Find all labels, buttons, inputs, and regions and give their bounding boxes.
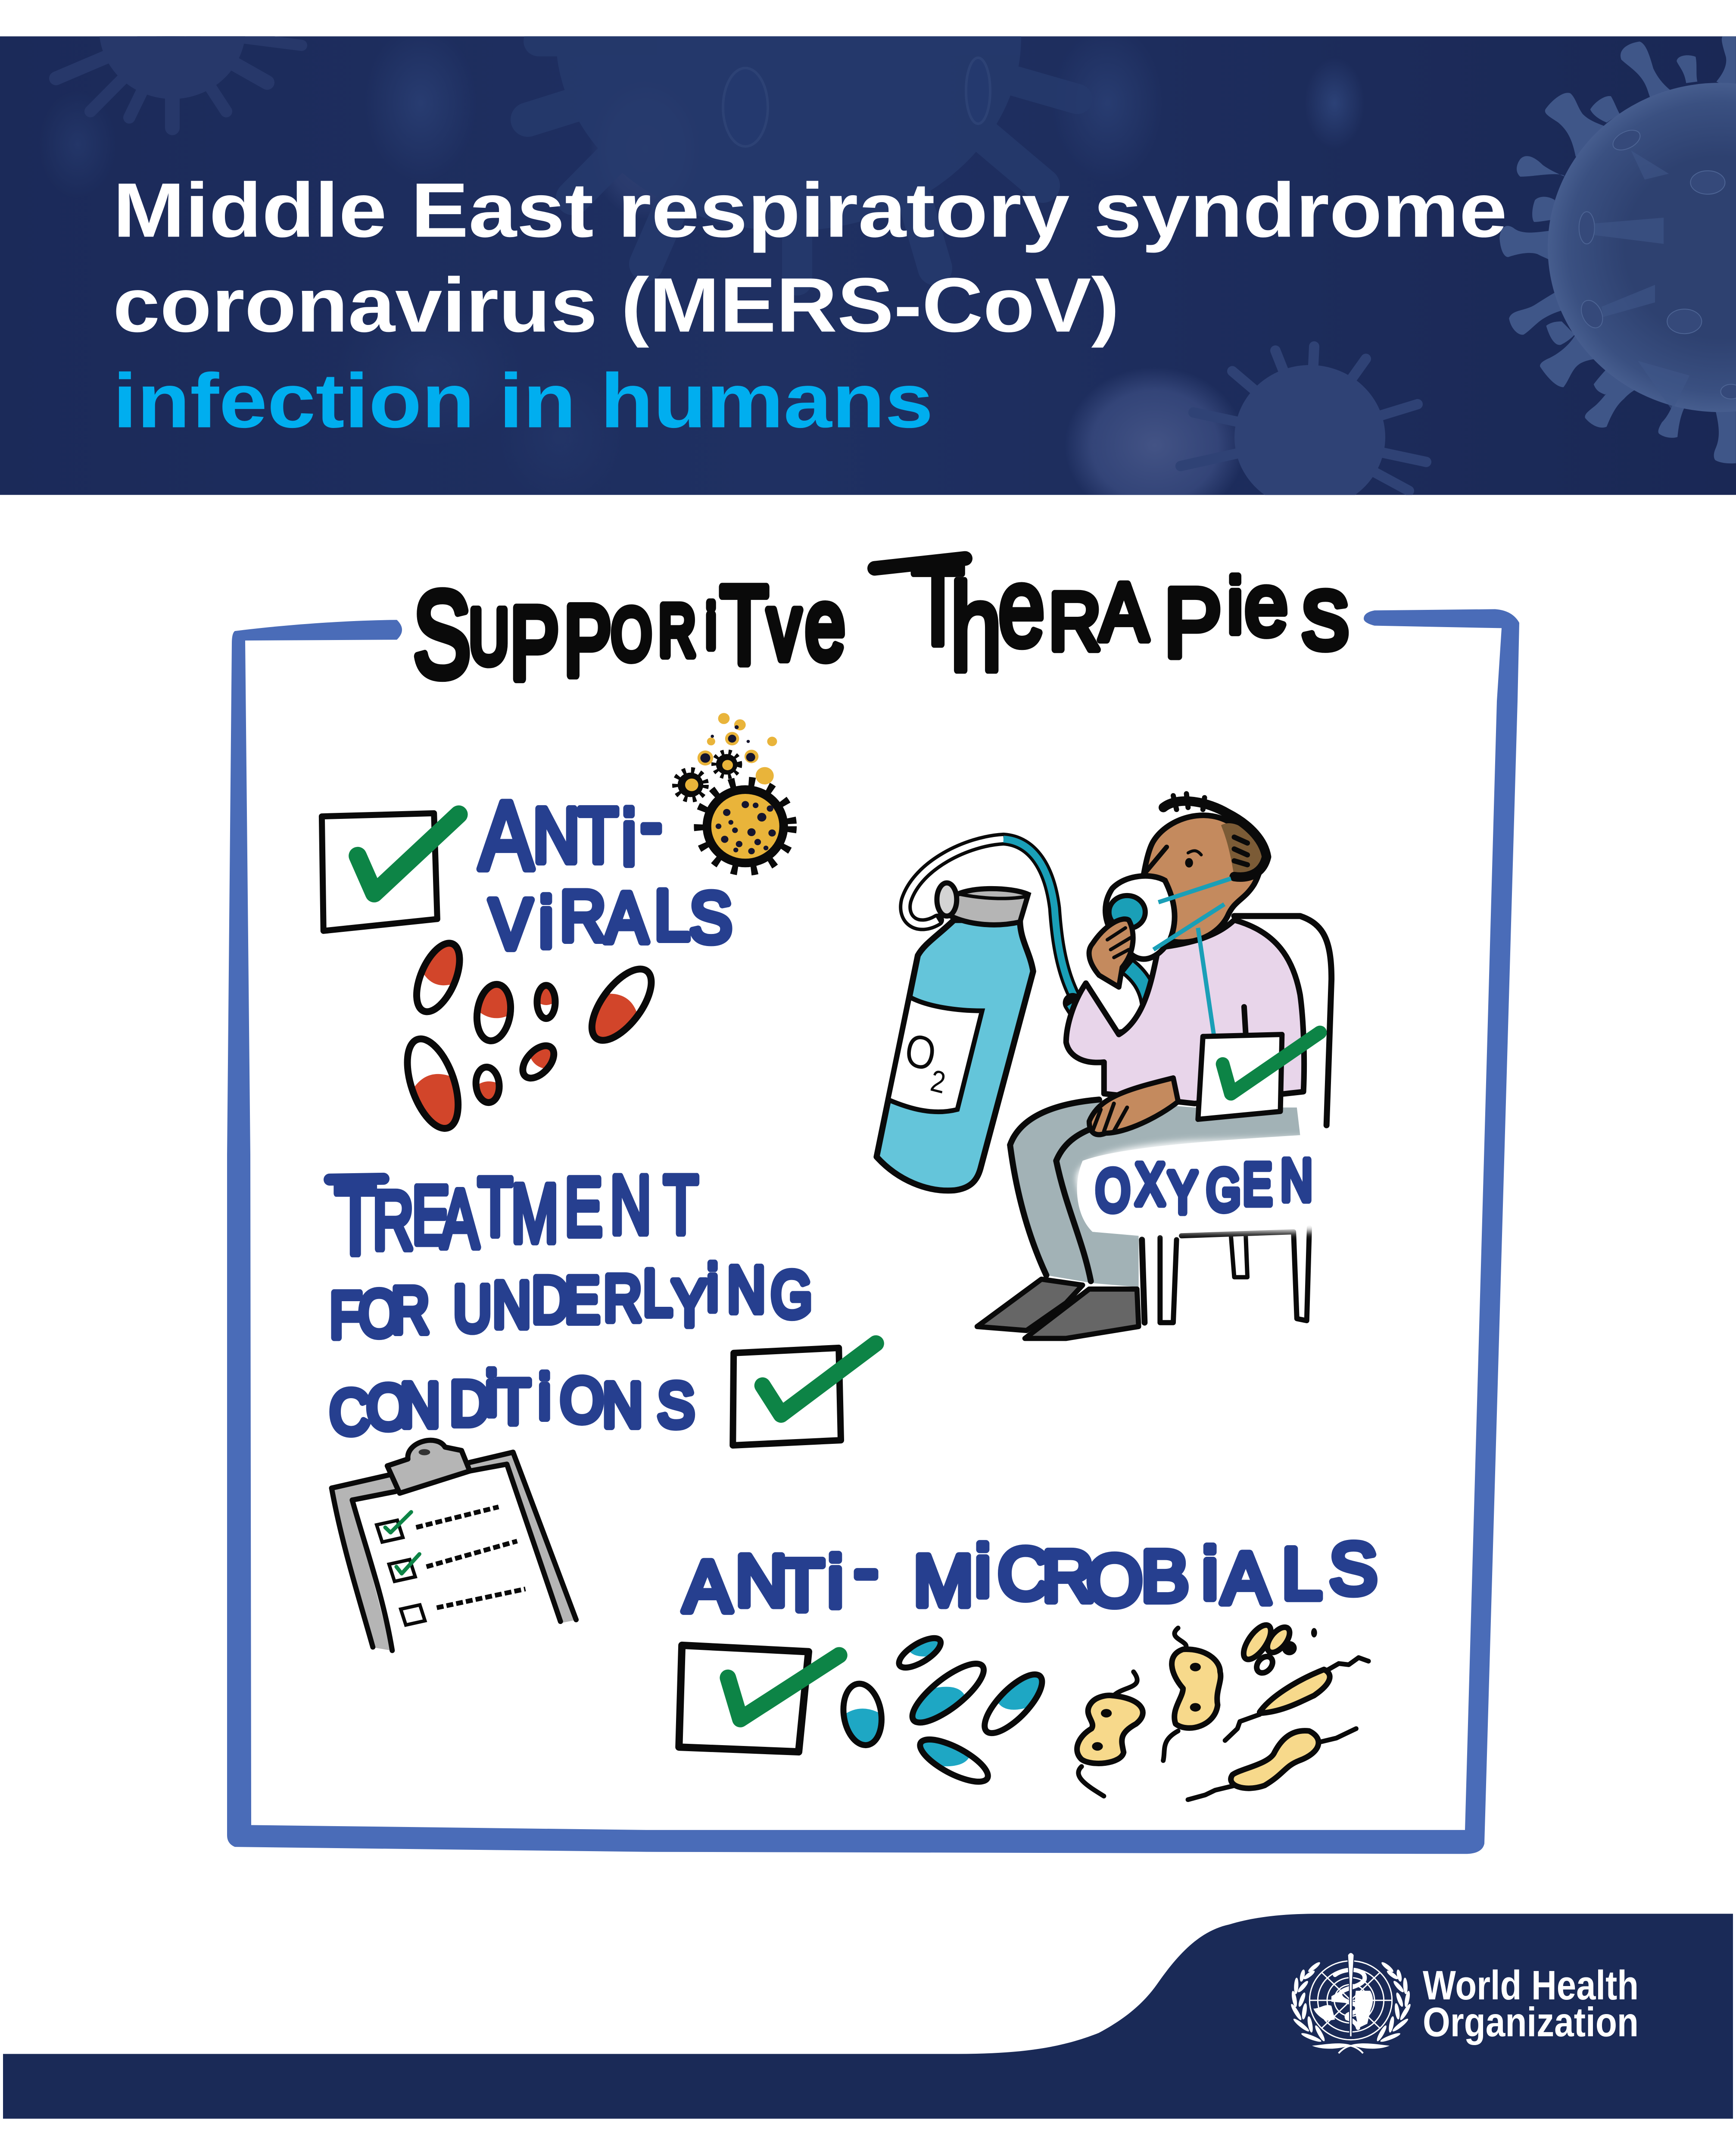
- text: organization name: Organization: [1423, 1999, 1639, 2045]
- heading: supportive therapies: e: [998, 545, 1045, 669]
- heading: supportive therapies: T: [911, 540, 964, 669]
- heading: supportive therapies: S: [413, 566, 471, 702]
- virus: faint large top centre: [528, 0, 1077, 281]
- heading: supportive therapies: P: [510, 585, 559, 701]
- heading: supportive therapies: U: [469, 593, 509, 680]
- label: anti-virals: ANTi-: [479, 780, 662, 890]
- heading: supportive therapies: i: [1228, 562, 1243, 650]
- icon: oxygen tank: [876, 883, 1033, 1190]
- label: anti-virals: ViRALS: [489, 876, 732, 964]
- icon: bacteria: [1077, 1624, 1368, 1800]
- title text: infection in humans: [113, 357, 933, 444]
- icon: antivirals checkbox: [322, 813, 459, 931]
- heading: supportive therapies: e: [1245, 556, 1288, 653]
- icon: anti-microbials checkbox: [679, 1645, 839, 1752]
- icon: oxygen tube: [905, 839, 1150, 1040]
- heading: supportive therapies: e: [805, 568, 845, 681]
- icon: treatment checkbox: [733, 1343, 876, 1445]
- icon: red capsules: [397, 937, 663, 1134]
- label: treatment for underlying conditions: TREATMENT: [334, 1159, 698, 1275]
- glow beside lower virus: [1073, 374, 1236, 495]
- icon: chair: [1142, 916, 1331, 1323]
- text: organization name: [1423, 1962, 1639, 2045]
- header banner: [0, 36, 1736, 495]
- text: organization name: World Health: [1423, 1962, 1639, 2008]
- logo: World Health Organization: [1290, 1952, 1639, 2053]
- icon: WHO emblem: [1290, 1952, 1412, 2053]
- label: treatment for underlying conditions: FOR UNDERLYiNG: [330, 1252, 812, 1352]
- section: oxygen: [876, 794, 1331, 1338]
- heading: supportive therapies: h: [950, 558, 1002, 696]
- icon: virus particles: [676, 713, 790, 869]
- label: treatment for underlying conditions: CONDiTiONS: [330, 1359, 695, 1447]
- label: treatment for underlying conditions: [330, 1159, 812, 1447]
- label: anti-virals: [479, 780, 732, 964]
- heading: supportive therapies: [413, 540, 1349, 702]
- heading: supportive therapies: P: [564, 585, 611, 696]
- icon: oxygen tank: 2: [928, 1063, 948, 1100]
- heading: supportive therapies: O: [611, 593, 651, 675]
- heading: supportive therapies: i: [706, 592, 716, 661]
- heading: supportive therapies: T: [720, 564, 768, 687]
- virus: large right: [1499, 36, 1736, 463]
- heading: supportive therapies: v: [768, 575, 801, 679]
- virus: lower centre: [1181, 347, 1426, 509]
- icon: blue capsules: [840, 1635, 1053, 1786]
- title text: [113, 167, 1507, 444]
- icon: oxygen checkbox: [1198, 1007, 1320, 1119]
- illustration: patient with oxygen tank: [876, 794, 1331, 1338]
- heading: supportive therapies: R: [659, 590, 696, 671]
- section: treatment for underlying conditions: [330, 1159, 876, 1650]
- virus: faint top left: [49, 36, 307, 135]
- icon: oxygen tank: O: [901, 1023, 940, 1082]
- icon: clipboard: [332, 1440, 577, 1650]
- section: anti-microbials: [679, 1528, 1378, 1800]
- heading: supportive therapies: P: [1164, 568, 1222, 678]
- label: oxygen: OXYGEN: [1096, 1148, 1312, 1225]
- heading: supportive therapies: s: [1302, 553, 1349, 671]
- label: anti-microbials: ANTi-MiCROBiALS: [683, 1528, 1378, 1627]
- title text: Middle East respiratory syndrome: [113, 167, 1507, 253]
- heading: supportive therapies: A: [1100, 566, 1148, 657]
- title text: coronavirus (MERS-CoV): [113, 262, 1119, 348]
- heading: supportive therapies: R: [1049, 576, 1101, 667]
- frame: supportive therapies panel: [227, 609, 1519, 1854]
- footer banner: [3, 1914, 1733, 2119]
- icon: patient: [977, 794, 1323, 1338]
- section: antivirals: [322, 713, 790, 1134]
